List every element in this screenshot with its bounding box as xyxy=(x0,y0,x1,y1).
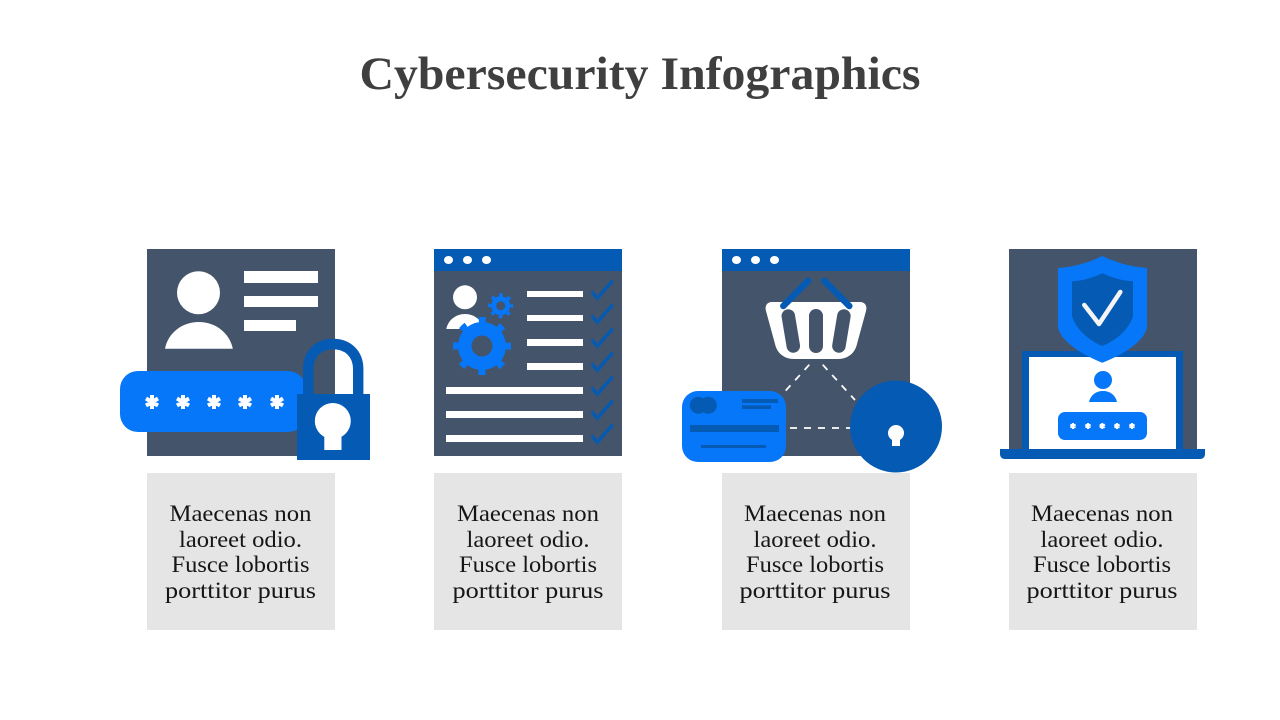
text block 3: Maecenas non xyxy=(744,501,886,527)
panel: secure shopping xyxy=(682,249,942,472)
panel background xyxy=(722,249,910,456)
icon: small gear xyxy=(490,295,512,317)
browser header xyxy=(434,249,622,271)
text block 3 xyxy=(722,473,910,630)
icon: shopping basket xyxy=(766,281,866,359)
text block 2: Maecenas non xyxy=(457,501,599,527)
text block 4: laoreet odio. xyxy=(1040,527,1164,553)
text block 4: porttitor purus xyxy=(1026,578,1178,604)
title: Cybersecurity Infographics xyxy=(360,48,920,100)
icon: laptop xyxy=(1000,351,1205,459)
icon: large gear xyxy=(456,320,508,372)
profile text lines xyxy=(244,271,318,331)
icon: keyhole circle xyxy=(850,380,942,472)
icon: check marks xyxy=(592,281,613,442)
icon: login password field xyxy=(1058,412,1147,440)
panel background xyxy=(147,249,335,456)
dashed connectors xyxy=(782,365,855,428)
text block 3: laoreet odio. xyxy=(754,527,876,553)
browser header xyxy=(722,249,910,271)
text block 3: porttitor purus xyxy=(740,578,890,604)
text block 2: laoreet odio. xyxy=(466,527,590,553)
checklist lines xyxy=(446,291,583,442)
icon: padlock xyxy=(297,344,370,460)
text block 3: Fusce lobortis xyxy=(746,552,884,578)
text block 2 xyxy=(434,473,622,630)
panel: settings checklist xyxy=(434,249,622,456)
icon: user xyxy=(446,285,484,329)
text block 1 xyxy=(147,473,335,630)
icon: shield xyxy=(1058,256,1147,363)
panel: identity and password xyxy=(120,249,370,460)
text block 4: Fusce lobortis xyxy=(1033,552,1171,578)
text block 4 xyxy=(1009,473,1197,630)
text block 1: Maecenas non xyxy=(170,501,312,527)
icon: credit card xyxy=(682,391,786,462)
text block 1: laoreet odio. xyxy=(179,527,302,553)
text block 2: Fusce lobortis xyxy=(459,552,597,578)
panel background xyxy=(434,249,622,456)
text block 2: porttitor purus xyxy=(452,578,604,604)
icon: password field xyxy=(120,371,306,432)
panel background xyxy=(1009,249,1197,456)
panel: protected login xyxy=(1000,249,1205,459)
icon: user profile xyxy=(165,271,233,349)
icon: login user xyxy=(1089,371,1117,402)
text block 1: Fusce lobortis xyxy=(172,552,310,578)
text block 4: Maecenas non xyxy=(1031,501,1173,527)
text block 1: porttitor purus xyxy=(165,578,316,604)
